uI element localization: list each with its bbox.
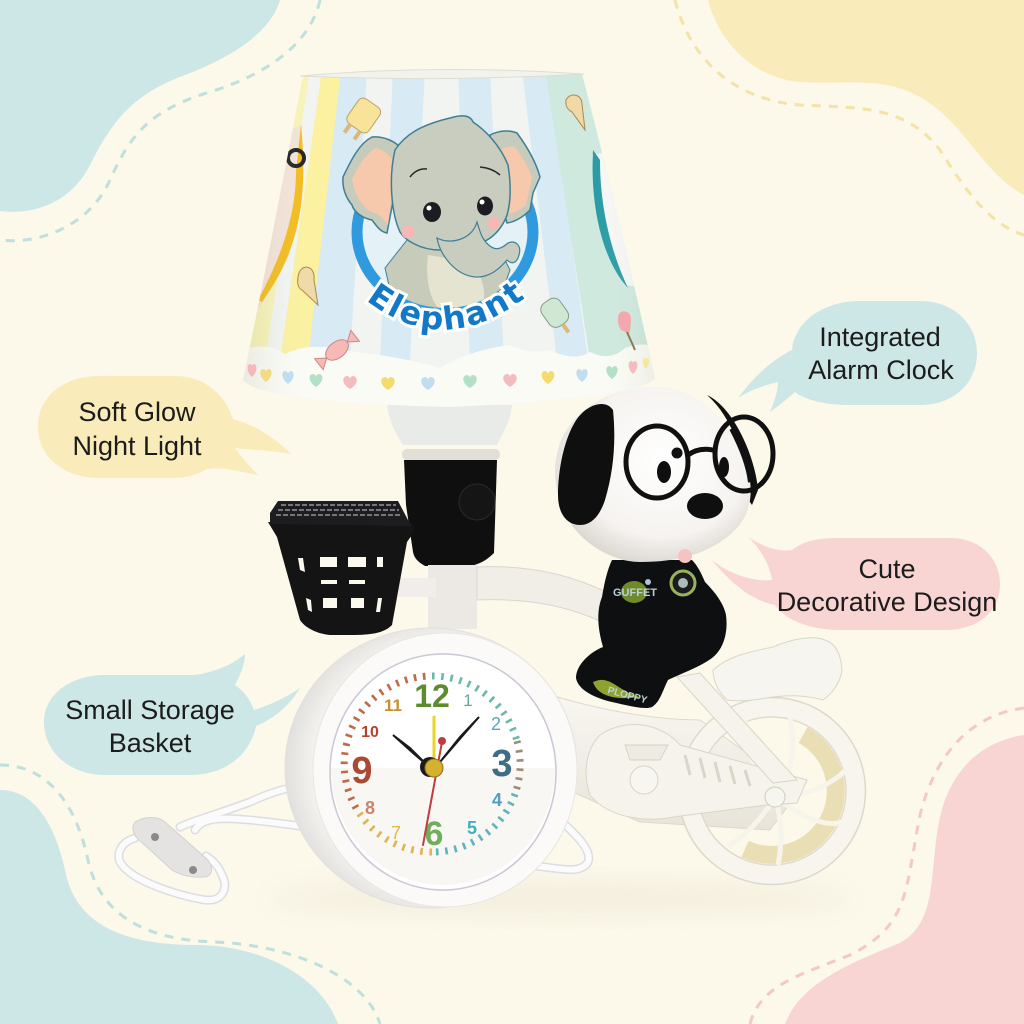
basket	[268, 501, 415, 635]
chest badge	[671, 571, 695, 595]
corner blob: bottom left	[0, 790, 338, 1024]
callout: cute decorative design: Decorative Design	[777, 587, 997, 617]
dog figure	[555, 387, 773, 708]
side character right	[592, 150, 634, 288]
power cord and plug	[119, 788, 589, 900]
shade sweets	[298, 95, 635, 370]
clock numerals: 11	[384, 696, 402, 715]
shade stripes	[240, 70, 660, 360]
shade scalloped border	[244, 344, 654, 407]
elephant body	[385, 240, 510, 312]
bicycle chain guard and pedal	[586, 725, 807, 819]
callout: integrated alarm clock	[738, 301, 977, 412]
left ear	[558, 404, 614, 525]
shoe logo: PLOPPY	[606, 685, 649, 706]
clock numerals: 6	[425, 815, 443, 853]
blue ring	[357, 153, 533, 311]
callout: soft glow night light: Soft Glow	[78, 397, 196, 427]
elephant head	[391, 116, 510, 250]
glasses	[626, 417, 773, 498]
clock numerals: 9	[351, 750, 373, 792]
pink dot	[678, 549, 692, 563]
alarm clock	[285, 628, 577, 908]
callout: small storage basket: Small Storage	[65, 695, 235, 725]
elephant badge	[342, 115, 541, 338]
clock numerals: 8	[365, 798, 375, 818]
clock numerals: 5	[467, 818, 477, 838]
clock numerals: 4	[492, 790, 502, 810]
clock numerals: 1	[463, 691, 473, 710]
lamp shade	[243, 69, 866, 908]
trunk	[437, 222, 520, 277]
callout: soft glow night light	[38, 376, 291, 478]
corner blob: bottom right	[785, 735, 1024, 1024]
side character left	[258, 125, 306, 308]
shoe logo	[593, 680, 649, 706]
chest logo	[613, 579, 657, 603]
bicycle frame	[557, 697, 800, 830]
clock numerals: 3	[491, 743, 513, 785]
callout: integrated alarm clock: Alarm Clock	[808, 355, 954, 385]
callout: small storage basket	[44, 654, 300, 775]
callout: small storage basket: Basket	[109, 728, 192, 758]
eyes and nose	[657, 457, 729, 519]
clock numerals	[351, 678, 513, 853]
callout: cute decorative design	[712, 537, 1000, 630]
callout: cute decorative design: Cute	[858, 554, 916, 584]
callout: integrated alarm clock: Integrated	[819, 322, 941, 352]
clock hands	[393, 717, 479, 845]
corner blob: top right	[708, 0, 1024, 195]
ground shadow	[270, 882, 850, 914]
right ear	[490, 131, 540, 223]
clock numerals: 12	[414, 678, 450, 714]
dog body	[576, 560, 727, 708]
bicycle fork	[677, 673, 797, 783]
elephant label: Elephant	[364, 278, 528, 338]
chest logo: GUFFET	[613, 587, 657, 599]
bicycle seat	[713, 638, 842, 701]
callout: soft glow night light: Night Light	[72, 431, 202, 461]
clock numerals: 2	[491, 714, 501, 734]
corner blob: top left	[0, 0, 280, 212]
clock numerals: 10	[361, 724, 379, 741]
basket openings	[298, 557, 383, 612]
rear wheel	[678, 698, 866, 884]
elephant face	[402, 167, 500, 238]
clock numerals: 7	[391, 823, 401, 843]
dog head	[555, 387, 751, 562]
clock ticks	[344, 676, 520, 852]
left ear	[343, 137, 400, 233]
lamp socket and post	[387, 405, 606, 629]
hearts row	[248, 358, 649, 390]
